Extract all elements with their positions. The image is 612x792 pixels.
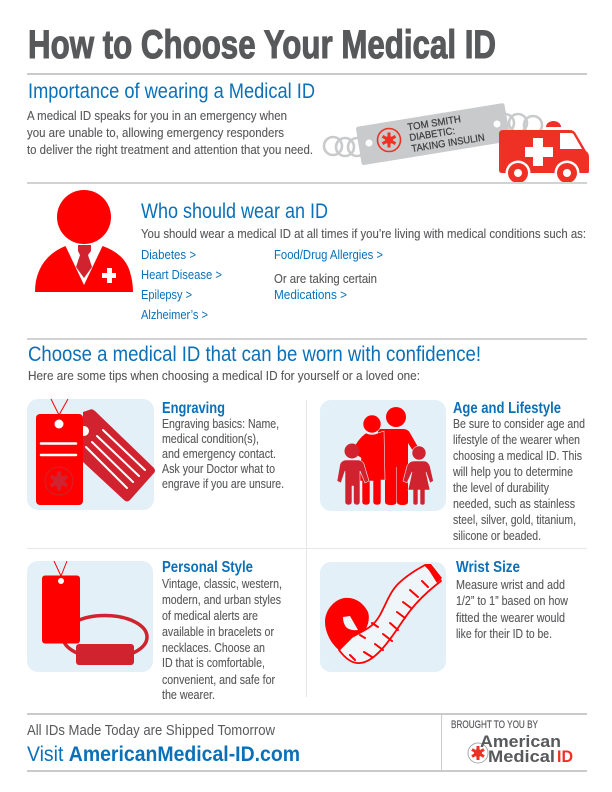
- icon: medical ID tag with chain: [324, 103, 542, 165]
- text: age and lifestyle: [452, 416, 585, 543]
- text: personal style: convenient, and safe for: [162, 672, 276, 687]
- heading: importance: Importance of wearing a Medical ID: [28, 80, 315, 103]
- links: conditions: Diabetes >: [141, 247, 196, 262]
- text: age and lifestyle: Be sure to consider age and: [453, 416, 585, 431]
- text: engraving: Ask your Doctor what to: [162, 461, 275, 476]
- text: engraving: Engraving basics: Name,: [162, 416, 279, 431]
- text: personal style: available in bracelets or: [162, 624, 275, 639]
- icon: engraving tags: [27, 399, 155, 510]
- links: conditions: [141, 247, 383, 322]
- text: age and lifestyle: needed, such as stainless: [453, 496, 575, 511]
- heading: engraving: Engraving: [162, 400, 225, 417]
- text: engraving: [162, 416, 284, 491]
- icon: medical ID tag with chain: DIABETIC:: [409, 126, 456, 144]
- icon: family: [320, 400, 446, 511]
- text: age and lifestyle: steel, silver, gold, titanium,: [453, 512, 576, 527]
- text: engraving: and emergency contact.: [162, 446, 276, 461]
- text block: importance: you are unable to, allowing emergency responders: [27, 125, 284, 140]
- text: wrist size: Measure wrist and add: [456, 577, 565, 592]
- heading: choose a medical ID: Choose a medical ID that can be worn with confidence!: [28, 343, 481, 366]
- text block: importance: to deliver the right treatment and attention that you need.: [27, 142, 313, 157]
- text: personal style: [162, 576, 282, 702]
- text: engraving: engrave if you are unsure.: [162, 476, 284, 491]
- text: wrist size: [456, 577, 568, 641]
- text: personal style: of medical alerts are: [162, 608, 258, 623]
- text: personal style: the wearer.: [162, 687, 215, 702]
- footer: [27, 713, 587, 772]
- text: brought to you by: BROUGHT TO YOU BY: [451, 719, 538, 731]
- text: wrist size: 1/2” to 1” based on how: [456, 593, 568, 608]
- text: wrist size: like for their ID to be.: [456, 626, 552, 641]
- text: shipping note: All IDs Made Today are Shipped Tomorrow: [27, 722, 275, 739]
- text: personal style: ID that is comfortable,: [162, 655, 265, 670]
- panel: wrist size: [320, 559, 568, 672]
- text: medications: Medications >: [274, 287, 347, 302]
- grid lines: [27, 400, 587, 697]
- links: conditions: Epilepsy >: [141, 287, 192, 302]
- divider: [27, 182, 587, 184]
- text: age and lifestyle: the level of durability: [453, 480, 549, 495]
- links: conditions: Heart Disease >: [141, 267, 222, 282]
- text: age and lifestyle: choosing a medical ID. This: [453, 448, 582, 463]
- text: personal style: necklaces. Choose an: [162, 640, 265, 655]
- icon: measuring tape: [320, 562, 446, 672]
- heading: who: Who should wear an ID: [141, 200, 328, 223]
- link: visit website: Visit AmericanMedical-ID.com: [27, 743, 300, 766]
- text: medications: Or are taking certain: [274, 271, 377, 286]
- logo: American Medical ID: American: [480, 732, 561, 751]
- text block: importance: A medical ID speaks for you in an emergency when: [27, 108, 287, 123]
- divider: [27, 73, 587, 75]
- icon: tag and bracelet: [27, 561, 153, 672]
- icon: medical ID tag with chain: TAKING INSULIN: [411, 133, 486, 155]
- divider: [27, 338, 587, 340]
- logo: American Medical ID: Medical: [488, 747, 555, 766]
- heading: age and lifestyle: Age and Lifestyle: [453, 400, 561, 417]
- section: importance of wearing a medical ID: [27, 80, 593, 186]
- text: wrist size: fitted the wearer would: [456, 610, 565, 625]
- text: engraving: medical condition(s),: [162, 431, 259, 446]
- logo: American Medical ID: ID: [557, 747, 573, 766]
- text: age and lifestyle: silicone or beaded.: [453, 528, 541, 543]
- text: personal style: Vintage, classic, western,: [162, 576, 282, 591]
- text: tips intro: Here are some tips when choosing a medical ID for yourself or a loved one:: [28, 368, 420, 383]
- text block: importance: [27, 108, 313, 157]
- logo: American Medical ID: [468, 732, 573, 766]
- section: who should wear an ID: [141, 200, 586, 322]
- icon: ambulance: [495, 121, 593, 186]
- heading: personal style: Personal Style: [162, 559, 253, 576]
- links: conditions: Alzheimer’s >: [141, 307, 208, 322]
- icon: medical ID tag with chain: TOM SMITH: [407, 114, 462, 133]
- panel: personal style: [27, 559, 282, 702]
- panel: age and lifestyle: [320, 400, 585, 543]
- text: age and lifestyle: will help you to determine: [452, 464, 573, 479]
- text: medications: [274, 271, 377, 302]
- heading: wrist size: Wrist Size: [456, 559, 520, 576]
- icon: person with medical tie: [35, 190, 133, 292]
- text: age and lifestyle: lifestyle of the wearer when: [453, 432, 580, 447]
- panel: engraving: [27, 399, 284, 510]
- title: How to Choose Your Medical ID: [28, 23, 496, 67]
- links: conditions: Food/Drug Allergies >: [274, 247, 383, 262]
- text: personal style: modern, and urban styles: [162, 592, 281, 607]
